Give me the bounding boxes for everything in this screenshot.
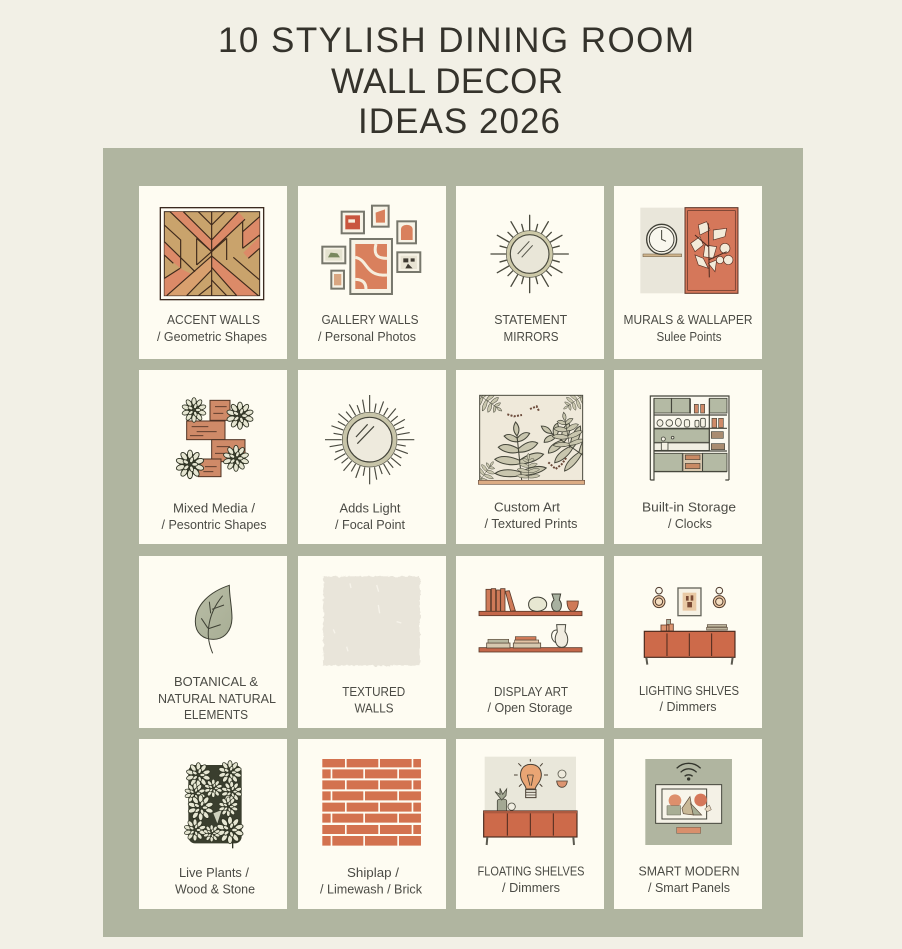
card: adds light — [298, 370, 446, 544]
label: / Smart Panels — [648, 880, 730, 895]
label: BOTANICAL & — [174, 674, 258, 689]
label: GALLERY WALLS — [322, 312, 419, 327]
icon: clock on shelf with floral mural — [640, 208, 738, 293]
label: Built-in Storage — [642, 500, 736, 515]
label — [494, 312, 567, 344]
label: TEXTURED — [342, 684, 405, 699]
label: / Dimmers — [660, 699, 717, 714]
label — [320, 865, 422, 897]
label: FLOATING SHELVES — [478, 864, 585, 879]
label — [175, 865, 255, 897]
label — [484, 500, 578, 531]
icon: sideboard with light bulb — [484, 757, 577, 845]
label: LIGHTING SHLVES — [639, 683, 739, 698]
label: MIRRORS — [504, 329, 559, 344]
title: WALL DECOR — [331, 62, 563, 101]
label: / Textured Prints — [484, 516, 578, 531]
label — [478, 864, 585, 895]
panel: sage green board — [103, 148, 803, 937]
label: / Open Storage — [488, 700, 572, 715]
card: built-in storage — [614, 370, 762, 544]
label — [642, 500, 736, 531]
label — [624, 312, 752, 344]
label: DISPLAY ART — [494, 684, 568, 699]
label — [162, 501, 267, 532]
card: murals and wallpaper — [614, 186, 762, 359]
label: WALLS — [354, 701, 394, 716]
card: smart modern — [614, 739, 762, 909]
label — [342, 684, 405, 716]
label: SMART MODERN — [638, 864, 740, 879]
label: / Dimmers — [502, 880, 560, 895]
label — [158, 674, 276, 722]
label: NATURAL NATURAL — [158, 691, 276, 706]
label — [335, 501, 405, 532]
card: floating shelves — [456, 739, 604, 909]
card: live plants — [139, 739, 287, 909]
card: botanical and natural elements — [139, 556, 287, 728]
icon: sideboard with sconces and art — [644, 587, 735, 665]
label — [157, 312, 267, 344]
label — [638, 864, 740, 895]
card: lighting shelves — [614, 556, 762, 728]
icon: brick wall — [322, 759, 421, 846]
label: / Focal Point — [335, 517, 405, 532]
icon: living plant wall — [184, 761, 244, 848]
title — [218, 21, 694, 141]
icon: geometric wood accent wall — [160, 208, 264, 300]
label: Mixed Media / — [173, 501, 255, 516]
icon: open shelves with books and vases — [479, 589, 582, 652]
icon: botanical print — [478, 394, 585, 485]
card: display art — [456, 556, 604, 728]
label — [488, 684, 572, 715]
title: 10 STYLISH DINING ROOM — [218, 21, 694, 60]
label — [318, 312, 419, 344]
label: / Pesontric Shapes — [162, 517, 267, 532]
icon: gallery frames — [322, 206, 420, 294]
card: mixed media — [139, 370, 287, 544]
label: Adds Light — [340, 501, 401, 516]
card: shiplap limewash brick — [298, 739, 446, 909]
label: MURALS & WALLAPER — [624, 312, 752, 327]
label: STATEMENT — [494, 312, 567, 327]
label: Wood & Stone — [175, 882, 255, 897]
card: statement mirrors — [456, 186, 604, 359]
label: / Clocks — [668, 516, 712, 531]
label: Shiplap / — [347, 865, 399, 880]
label: / Limewash / Brick — [320, 882, 422, 897]
label: Live Plants / — [179, 865, 249, 880]
label: ELEMENTS — [184, 707, 248, 722]
icon: brick panels with plants — [176, 398, 254, 479]
icon: smart panel with wifi — [645, 759, 732, 845]
card: custom art — [456, 370, 604, 544]
label — [639, 683, 739, 714]
icon: leaf — [195, 585, 232, 653]
card: gallery walls — [298, 186, 446, 359]
icon: built-in shelving — [650, 396, 729, 480]
label: ACCENT WALLS — [167, 312, 260, 327]
title: IDEAS 2026 — [358, 102, 560, 141]
icon: plaster texture swatch — [323, 576, 420, 666]
card: accent walls — [139, 186, 287, 359]
icon: sunburst mirror — [325, 395, 414, 484]
card: textured walls — [298, 556, 446, 728]
label: / Personal Photos — [318, 329, 416, 344]
label: Sulee Points — [656, 329, 722, 344]
icon: sunburst mirror — [491, 215, 568, 293]
label: Custom Art — [494, 500, 560, 515]
label: / Geometric Shapes — [157, 329, 267, 344]
